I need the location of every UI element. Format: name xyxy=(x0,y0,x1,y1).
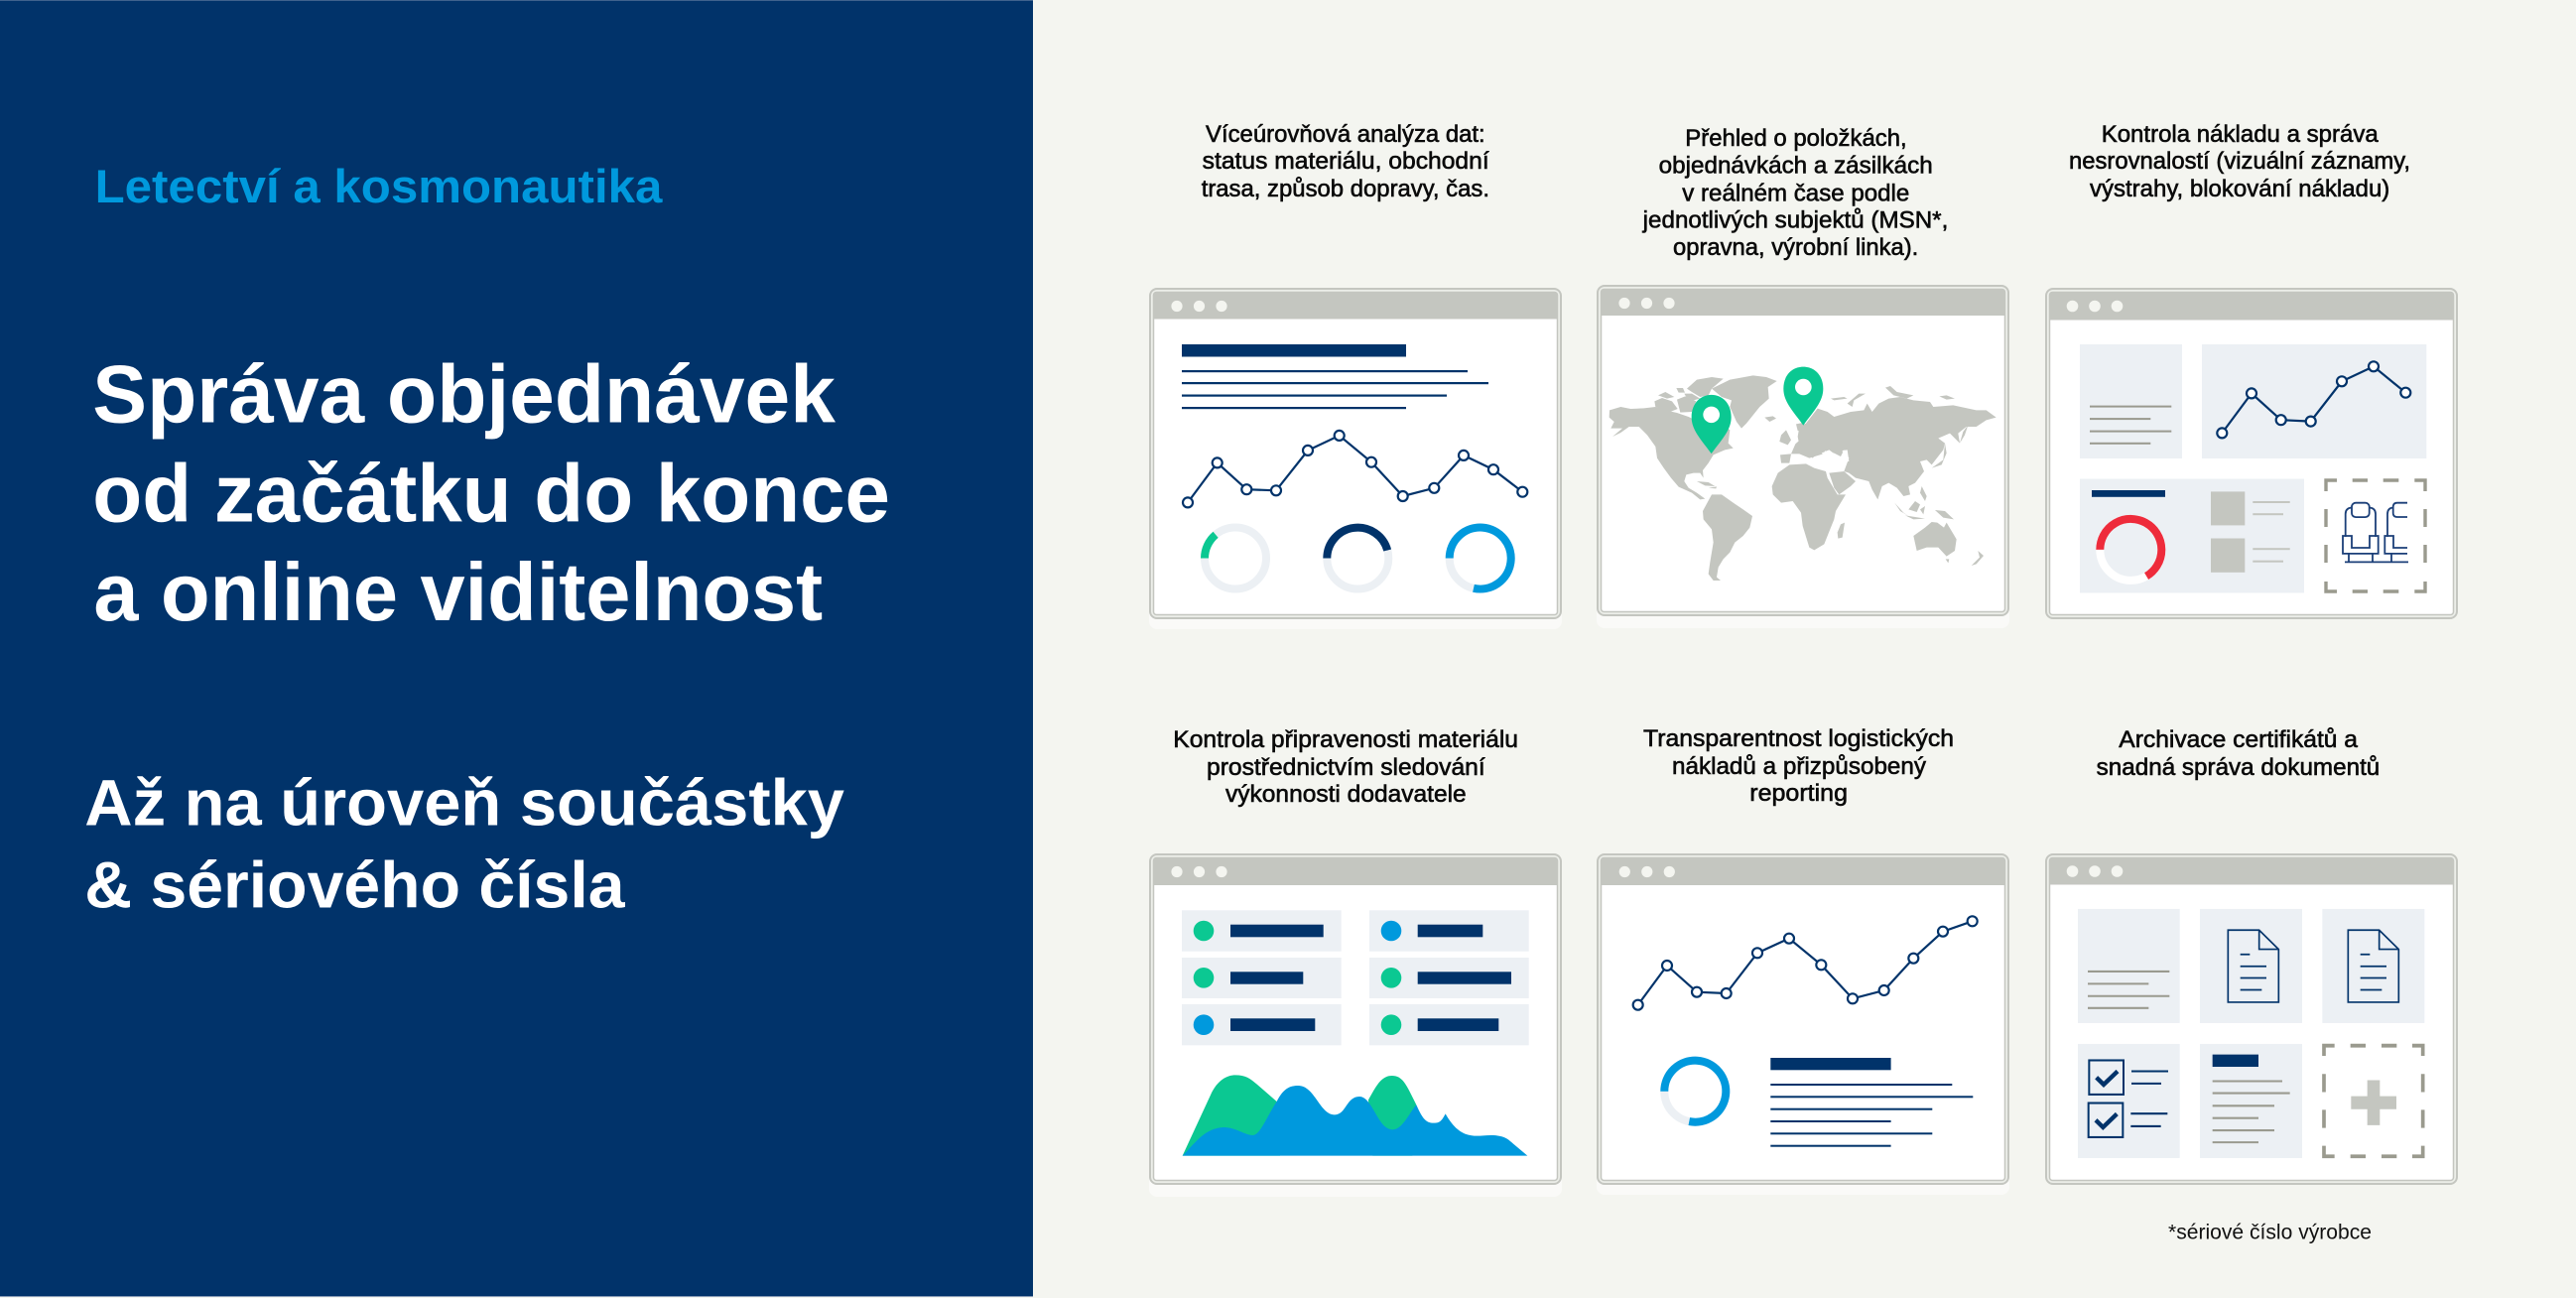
panel: supplier performance window xyxy=(1149,854,1562,1197)
icon: document xyxy=(2228,930,2278,1002)
text block: certificates archive xyxy=(2097,726,2380,781)
text block: certificates archive: Archivace certifikátů a xyxy=(2119,726,2359,753)
main title xyxy=(92,347,890,638)
footnote: *sériové číslo výrobce xyxy=(2168,1221,2372,1244)
text block: cargo control: výstrahy, blokování nákladu) xyxy=(2090,176,2389,202)
subtitle: Až na úroveň součástky xyxy=(84,765,844,839)
donut and legend card xyxy=(2080,478,2304,593)
line chart xyxy=(1633,916,1978,1010)
text block: logistics costs xyxy=(1643,725,1954,807)
donut charts xyxy=(1205,528,1511,589)
text lines xyxy=(1770,1058,1973,1147)
text block: logistics costs: reporting xyxy=(1749,780,1848,807)
text card xyxy=(2080,344,2182,458)
panel: cargo control window xyxy=(2046,289,2457,618)
report card lines xyxy=(2213,1055,2290,1142)
text block: real-time overview xyxy=(1642,125,1948,261)
text block: real-time overview: jednotlivých subjektů (MSN*, xyxy=(1642,207,1948,234)
text block: cargo control xyxy=(2069,121,2410,202)
text block: multi-level data analysis: Víceúrovňová analýza dat: xyxy=(1206,121,1485,148)
panel: world map window xyxy=(1597,286,2009,628)
document grid xyxy=(2078,909,2424,1158)
icon: aircraft seats xyxy=(2343,503,2408,562)
panel: analytics dashboard window xyxy=(1149,289,1562,629)
panel: documents window xyxy=(2046,854,2457,1184)
subtitle xyxy=(84,765,844,921)
text block: multi-level data analysis: trasa, způsob dopravy, čas. xyxy=(1202,176,1489,202)
text block: real-time overview: opravna, výrobní linka). xyxy=(1673,234,1918,261)
text block: multi-level data analysis xyxy=(1202,121,1489,202)
text block: cargo control: Kontrola nákladu a správa xyxy=(2102,121,2379,148)
status rows xyxy=(1182,910,1529,1045)
text block: real-time overview: Přehled o položkách, xyxy=(1685,125,1907,152)
icon: dashed add tile xyxy=(2324,1046,2423,1156)
text block: real-time overview: v reálném čase podle xyxy=(1682,180,1909,206)
main title: od začátku do konce xyxy=(92,447,890,539)
text block: material readiness: Kontrola připravenosti materiálu xyxy=(1173,726,1518,753)
text block: certificates archive: snadná správa dokumentů xyxy=(2097,754,2380,781)
donut chart xyxy=(1664,1061,1726,1122)
text lines xyxy=(1182,344,1488,409)
text card lines xyxy=(2088,972,2169,1008)
subtitle: & sériového čísla xyxy=(84,847,626,921)
world map xyxy=(1610,375,1996,581)
eyebrow: industry name: Letectví a kosmonautika xyxy=(95,160,663,212)
text block: cargo control: nesrovnalostí (vizuální záznamy, xyxy=(2069,148,2410,175)
panel: logistics reporting window xyxy=(1597,854,2009,1195)
text block: material readiness xyxy=(1173,726,1518,808)
area chart xyxy=(1183,1075,1527,1156)
text block: real-time overview: objednávkách a zásilkách xyxy=(1659,153,1933,180)
main title: a online viditelnost xyxy=(93,546,823,638)
text block: multi-level data analysis: status materiálu, obchodní xyxy=(1203,148,1489,175)
dashed frame xyxy=(2326,480,2425,591)
text block: logistics costs: nákladů a přizpůsobený xyxy=(1672,753,1926,780)
main title: Správa objednávek xyxy=(92,347,837,441)
icon: map pins xyxy=(1692,367,1823,454)
line chart xyxy=(1183,431,1527,507)
icon: document xyxy=(2348,930,2398,1002)
text block: material readiness: výkonnosti dodavatele xyxy=(1225,781,1467,808)
text block: material readiness: prostřednictvím sledování xyxy=(1207,754,1485,781)
line chart card xyxy=(2202,344,2426,458)
panel: left navy title panel xyxy=(0,0,1033,1297)
icon: checklist xyxy=(2089,1060,2168,1137)
text block: logistics costs: Transparentnost logistických xyxy=(1643,725,1954,752)
